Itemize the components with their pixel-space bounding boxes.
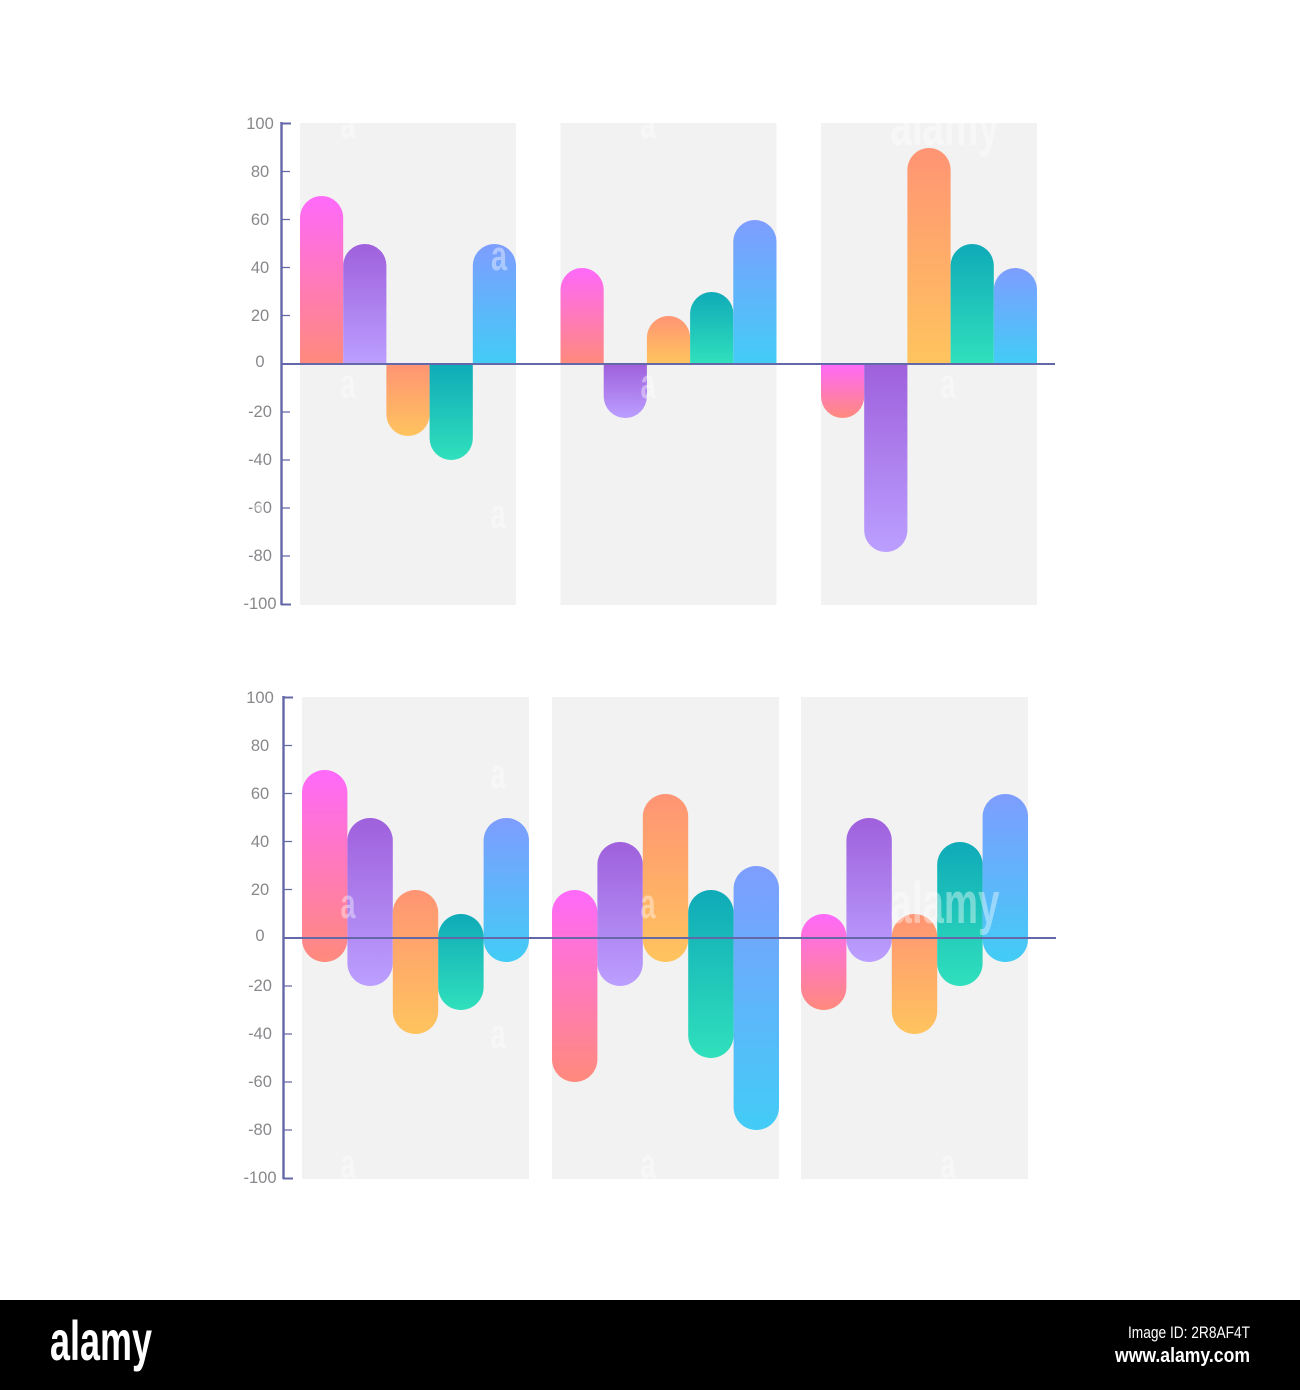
bottom chart: [243, 689, 1056, 1187]
watermarks: alamy: [890, 93, 1000, 158]
bottom chart: y axis labels: 20: [251, 881, 269, 899]
top chart: y axis labels: -100: [243, 595, 277, 613]
watermarks: a: [940, 360, 956, 407]
watermarks: a: [340, 100, 356, 147]
watermarks: a: [250, 480, 266, 527]
top chart: panel backgrounds: [300, 123, 1037, 605]
bottom chart: y axis labels: -100: [243, 1169, 277, 1187]
bottom chart: y axis labels: [243, 689, 277, 1187]
top chart: y axis labels: -40: [248, 451, 272, 469]
top chart: y axis labels: -60: [248, 499, 272, 517]
bottom chart: panel backgrounds: [302, 697, 1028, 1179]
top chart: y axis labels: 0: [255, 353, 265, 371]
watermarks: a: [640, 100, 656, 147]
watermarks: a: [490, 490, 506, 537]
top chart: group 2 bars: [560, 220, 776, 418]
watermarks: [250, 93, 1000, 1187]
watermarks: a: [340, 880, 356, 927]
footer url: www.alamy.com: [1114, 1345, 1250, 1367]
bottom chart: y axis labels: 80: [251, 737, 269, 755]
top chart: y axis labels: [243, 115, 277, 613]
watermarks: a: [491, 232, 507, 279]
watermarks: alamy: [890, 871, 1000, 936]
top chart: y axis labels: 80: [251, 163, 269, 181]
bottom chart: y axis labels: -80: [248, 1121, 272, 1139]
top chart: y axis labels: -80: [248, 547, 272, 565]
footer bar: [0, 1300, 1300, 1390]
bottom chart: y axis labels: -20: [248, 977, 272, 995]
watermarks: a: [640, 1140, 656, 1187]
top chart: group 3 bars: [821, 148, 1037, 552]
top chart: y axis and zero line: [281, 122, 1055, 605]
bottom chart: y axis and zero line: [283, 696, 1056, 1179]
bottom chart: group 1 bars: [302, 770, 529, 1034]
bottom chart: group 3 bars: [801, 794, 1028, 1034]
watermarks: a: [640, 880, 656, 927]
watermarks: a: [490, 750, 506, 797]
watermarks: a: [340, 1140, 356, 1187]
top chart: y axis labels: 40: [251, 259, 269, 277]
bottom chart: y axis labels: 0: [255, 927, 265, 945]
bottom chart: group 2 bars: [552, 794, 779, 1130]
bottom chart: y axis labels: -40: [248, 1025, 272, 1043]
bottom chart: y axis labels: -60: [248, 1073, 272, 1091]
watermarks: a: [640, 360, 656, 407]
top chart: y axis labels: -20: [248, 403, 272, 421]
top chart: y axis labels: 60: [251, 211, 269, 229]
bottom chart: y axis labels: 60: [251, 785, 269, 803]
watermarks: a: [940, 1140, 956, 1187]
bottom chart: y axis labels: 100: [246, 689, 274, 707]
watermarks: a: [490, 1010, 506, 1057]
footer logo: alamy: [50, 1309, 152, 1372]
footer image id: Image ID: 2R8AF4T: [1128, 1323, 1250, 1342]
top chart: y axis labels: 20: [251, 307, 269, 325]
bottom chart: y axis labels: 40: [251, 833, 269, 851]
watermarks: a: [340, 360, 356, 407]
top chart: group 1 bars: [300, 196, 516, 460]
top chart: [243, 115, 1055, 613]
top chart: y axis labels: 100: [246, 115, 274, 133]
